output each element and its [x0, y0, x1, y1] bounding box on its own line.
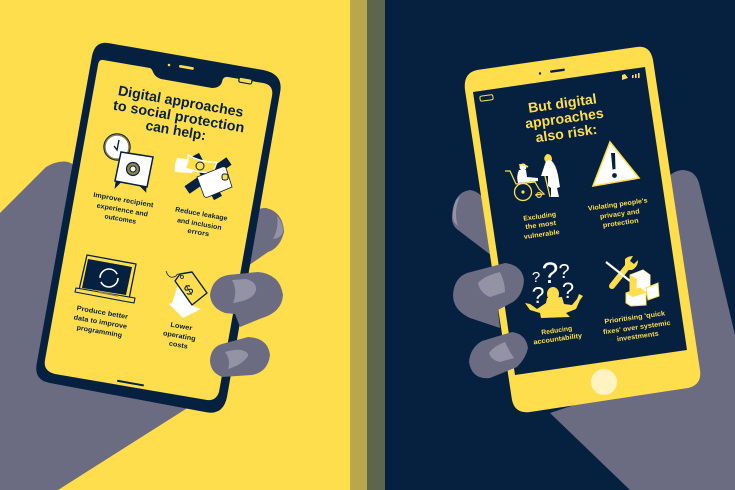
- left hand lower finger: [210, 337, 270, 377]
- title: but digital approaches also risk: [524, 90, 605, 145]
- phone body: [36, 43, 281, 413]
- caption: lower operating costs: operating: [162, 330, 196, 343]
- phone: right: [465, 47, 700, 412]
- caption: reducing accountability: Reducing: [541, 325, 573, 337]
- title: but digital approaches also risk: also risk:: [534, 121, 598, 145]
- caption: improve recipient experience: [93, 192, 155, 226]
- right navy background: [385, 0, 735, 490]
- caption: reduce leakage: Reduce leakage: [175, 206, 228, 223]
- title: but digital approaches also risk: approaches: [524, 105, 605, 131]
- grey-green centre stripe: [367, 0, 385, 490]
- home bar: [117, 380, 144, 386]
- caption: violating privacy: privacy and: [599, 208, 640, 221]
- status: signal and wifi: [115, 56, 137, 62]
- caption: reducing accountability: accountability: [533, 333, 583, 346]
- caption: prioritising quick fixes: investments: [617, 331, 659, 343]
- icon: clock and safe: [104, 134, 153, 192]
- status: battery: [239, 77, 252, 84]
- icon: confused person with question marks: ?: [558, 261, 570, 283]
- phone body: [465, 47, 700, 412]
- icon: price tag and down arrow: [166, 271, 207, 318]
- icon: warning triangle: [593, 142, 639, 186]
- caption: prioritising quick fixes: Prioritising 'quick: [604, 310, 666, 326]
- right hand upper finger: [453, 263, 524, 328]
- title: but digital approaches also risk: But digital: [527, 90, 598, 116]
- caption: excluding the most vulnerable: [523, 211, 560, 241]
- caption: prioritising quick fixes: fixes' over systemic: [603, 320, 671, 336]
- caption: violating privacy: protection: [602, 218, 639, 229]
- caption: excluding the most vulnerable: Excluding: [523, 211, 557, 223]
- title: digital approaches can help: to social protection: [112, 97, 246, 136]
- icon: price tag and down arrow: $: [181, 281, 196, 299]
- icon: confused person with question marks: ?: [542, 257, 558, 290]
- phone screen: [45, 60, 272, 400]
- caption: violating privacy: [588, 197, 648, 229]
- caption: reduce leakage: and inclusion: [176, 217, 222, 232]
- caption: produce better data: [73, 305, 129, 339]
- caption: reduce leakage: [175, 206, 228, 238]
- icon: wrench, screwdriver and boxes: [606, 256, 659, 306]
- olive centre stripe: [350, 0, 367, 490]
- caption: improve recipient experience: outcomes: [104, 213, 137, 226]
- status: wifi and signal: [622, 73, 640, 80]
- caption: reduce leakage: errors: [187, 228, 210, 238]
- notch camera and speaker: [168, 64, 194, 70]
- left hand palm and thumb: [0, 162, 200, 490]
- caption: excluding the most vulnerable: vulnerable: [523, 229, 560, 241]
- title: digital approaches can help: can help:: [144, 117, 207, 143]
- left hand middle finger: [210, 272, 283, 327]
- caption: lower operating costs: [162, 322, 196, 351]
- caption: excluding the most vulnerable: the most: [525, 220, 557, 231]
- left yellow background: [0, 0, 350, 490]
- right hand palm and thumb: [550, 170, 735, 490]
- camera and speaker: [539, 68, 565, 75]
- caption: produce better data: data to improve: [73, 314, 128, 331]
- caption: reducing accountability: [533, 325, 583, 346]
- caption: produce better data: programming: [76, 325, 123, 339]
- left hand top finger: [240, 208, 284, 268]
- phone screen: [473, 67, 687, 375]
- caption: lower operating costs: costs: [168, 340, 188, 351]
- icon: confused person with question marks: [525, 257, 583, 318]
- right hand lower finger: [469, 332, 528, 378]
- icon: wheelchair user and older person: [505, 154, 560, 200]
- caption: improve recipient experience: experience and: [96, 203, 148, 218]
- caption: violating privacy: Violating people's: [588, 197, 648, 213]
- icon: confused person with question marks: ?: [532, 269, 540, 286]
- caption: prioritising quick fixes: [603, 310, 671, 343]
- icon: confused person with question marks: ?: [562, 278, 574, 303]
- status: battery: [480, 95, 493, 101]
- home button: [591, 369, 617, 395]
- icon: confused person with question marks: ?: [532, 282, 544, 308]
- right hand back finger: [452, 190, 500, 262]
- caption: produce better data: Produce better: [76, 305, 129, 321]
- icon: laptop with refresh arrows: [75, 255, 136, 303]
- caption: improve recipient experience: Improve recipient: [93, 192, 155, 209]
- title: digital approaches can help: [112, 82, 246, 143]
- phone: left: [36, 43, 281, 413]
- caption: lower operating costs: Lower: [170, 322, 193, 332]
- title: digital approaches can help: Digital approaches: [117, 82, 245, 120]
- icon: wallet, banknote and cross: [175, 155, 232, 198]
